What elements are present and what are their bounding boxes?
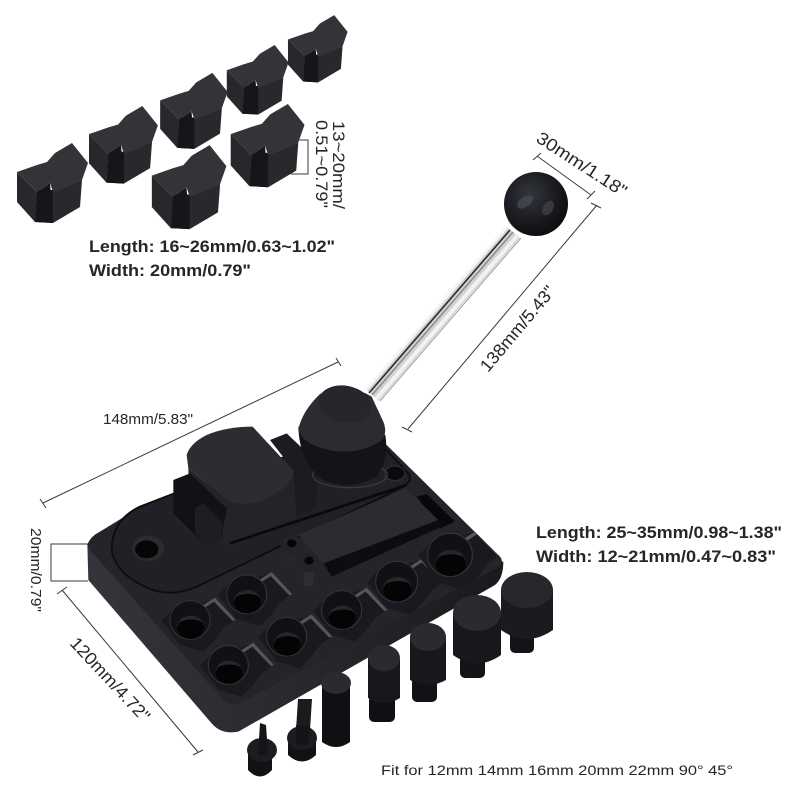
text: punch length and width: Width: 12~21mm/0.47~0.83" <box>536 547 776 566</box>
base plate side <box>87 543 503 732</box>
base plate top <box>87 445 502 705</box>
die block 7 <box>231 104 305 187</box>
dimension: handle length: 138mm/5.43" <box>476 282 559 376</box>
rotating knob <box>298 381 387 488</box>
pins <box>247 572 553 776</box>
tool body front <box>188 468 297 547</box>
dimension: die height <box>291 120 348 209</box>
dimension: die height: 0.51~0.79" <box>312 120 331 208</box>
left clamp <box>173 473 227 545</box>
long block <box>298 488 455 577</box>
slot line <box>230 485 407 543</box>
pin 1 <box>501 572 553 653</box>
screws <box>281 535 320 586</box>
dimension: base height: 20mm/0.79" <box>27 528 43 612</box>
die block 3 <box>160 73 228 149</box>
pin 7 <box>247 723 277 776</box>
die block 2 <box>89 106 158 184</box>
die block 4 <box>227 45 289 115</box>
dimension: die height: 13~20mm/ <box>329 121 348 209</box>
recess holes <box>162 530 501 697</box>
pin 6 <box>287 699 317 762</box>
dimension: base length <box>40 358 341 508</box>
text: punch length and width: Length: 25~35mm/0.98~1.38" <box>536 523 782 542</box>
plate hole left <box>132 536 164 561</box>
text: die length and width: Width: 20mm/0.79" <box>89 261 251 280</box>
die block 5 <box>288 15 348 82</box>
die block 6 <box>152 145 226 229</box>
dimension: ball diameter: 30mm/1.18" <box>533 128 631 201</box>
pin 4 <box>368 645 400 722</box>
tool body back block <box>270 433 318 517</box>
raised oval plate <box>112 447 410 593</box>
pin 2 <box>453 595 501 678</box>
dimension: base width <box>57 587 203 755</box>
plate hole right <box>385 466 405 481</box>
tool body dome top <box>187 427 293 504</box>
dimension: base height <box>27 528 88 612</box>
dimension: base length: 148mm/5.83" <box>103 412 193 428</box>
die block 1 <box>17 143 88 223</box>
text: punch length and width <box>536 523 782 566</box>
text: fit sizes: Fit for 12mm 14mm 16mm 20mm 22mm 90° 45° <box>381 762 733 778</box>
panel: small dies <box>17 15 348 229</box>
base tool <box>87 381 503 732</box>
pin 5 <box>321 672 351 747</box>
text: die length and width <box>89 237 335 280</box>
pin 3 <box>410 623 446 702</box>
handle rod <box>366 227 521 401</box>
ball knob <box>504 172 568 237</box>
dimension: handle length <box>402 203 601 432</box>
dimension: base width: 120mm/4.72" <box>66 633 154 726</box>
text: die length and width: Length: 16~26mm/0.63~1.02" <box>89 237 335 256</box>
